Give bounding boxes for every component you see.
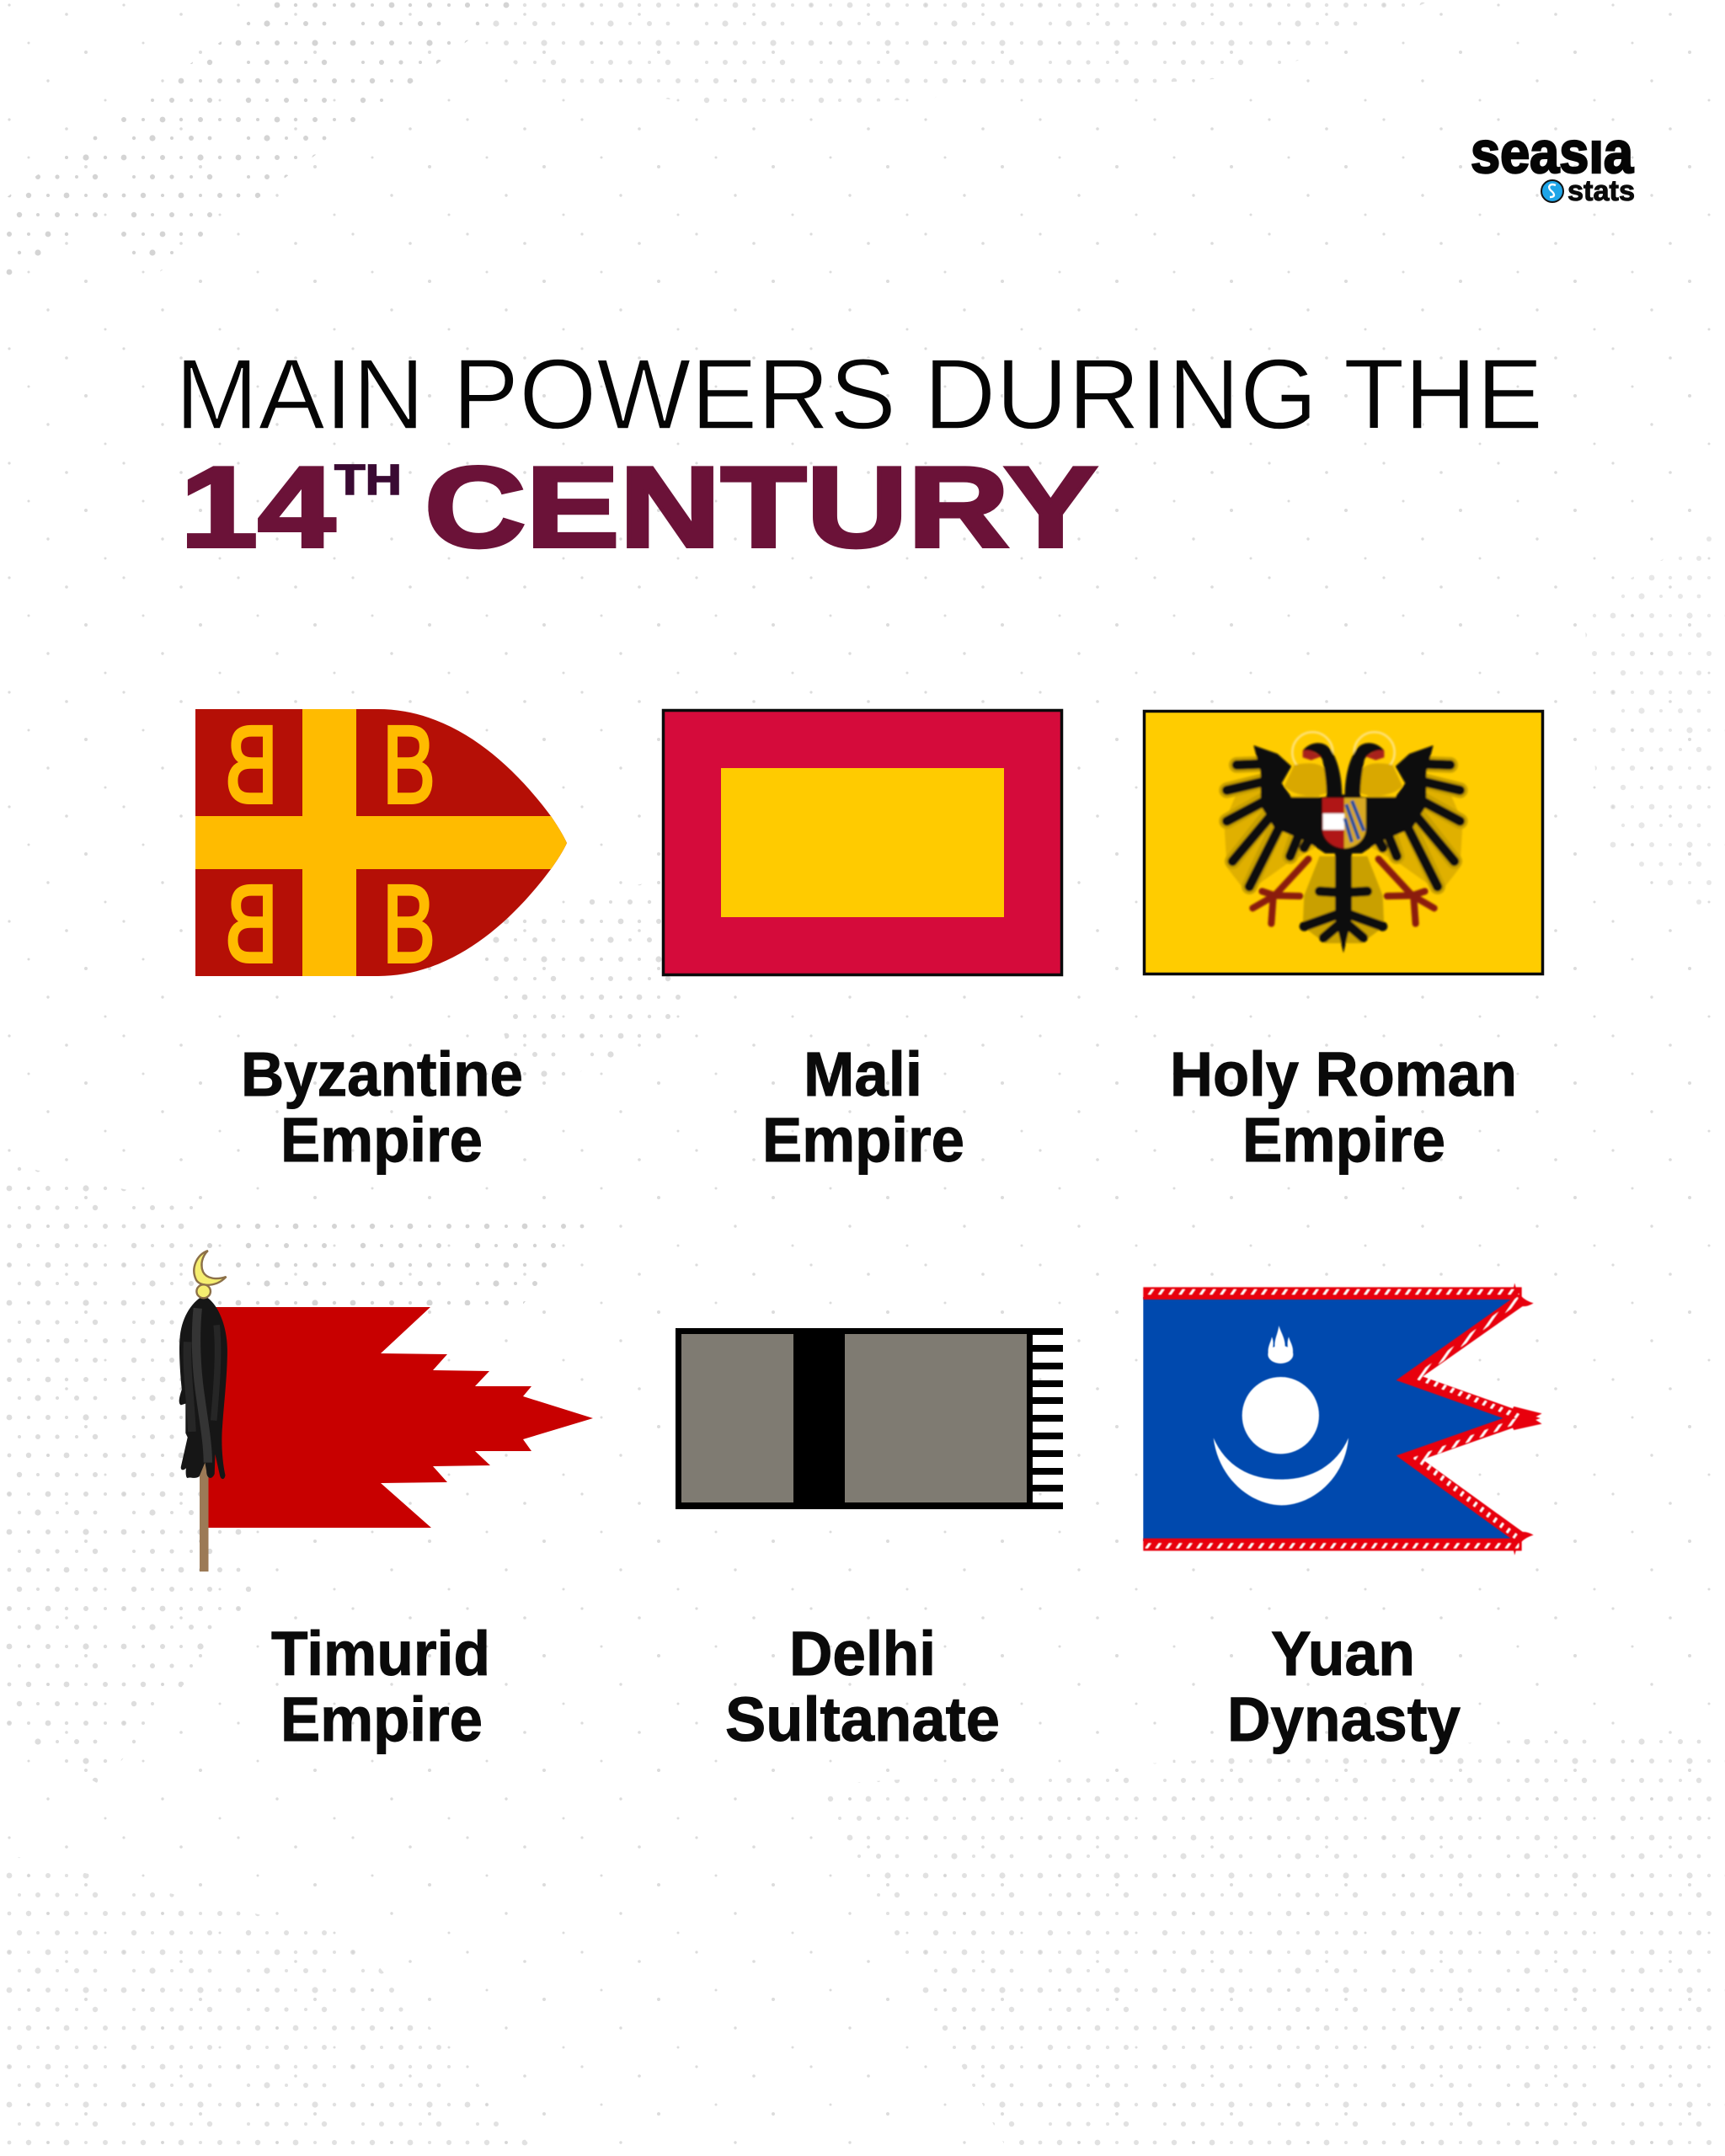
title line 2: TH	[334, 456, 402, 504]
label: Timurid Empire: Empire	[280, 1684, 483, 1754]
label: Mali Empire	[762, 1039, 964, 1175]
panel: Byzantine Empire	[195, 704, 567, 1175]
title line 1: MAIN POWERS DURING THE	[175, 339, 1543, 451]
title line 2: CENTURY	[425, 443, 1097, 571]
label: Delhi Sultanate	[725, 1619, 1000, 1754]
label: Mali Empire: Empire	[762, 1105, 964, 1175]
logo: seasia stats	[1471, 120, 1635, 207]
title	[175, 339, 1543, 571]
flag: Byzantine: B	[225, 704, 278, 827]
flag: Delhi	[676, 1328, 1063, 1509]
label: Byzantine Empire: Byzantine	[241, 1039, 523, 1109]
label: Yuan Dynasty: Dynasty	[1227, 1684, 1461, 1754]
panel: Yuan Dynasty	[1143, 1283, 1542, 1754]
label: Yuan Dynasty: Yuan	[1271, 1619, 1415, 1689]
label: Timurid Empire: Timurid	[271, 1619, 490, 1689]
label: Holy Roman Empire: Empire	[1242, 1105, 1445, 1175]
icon: black tassel and crescent finial	[179, 1251, 227, 1479]
logo icon	[1541, 180, 1563, 202]
label: Holy Roman Empire: Holy Roman	[1170, 1039, 1517, 1109]
label: Mali Empire: Mali	[804, 1039, 922, 1109]
icon: flag pole	[200, 1432, 209, 1572]
panel: Delhi Sultanate	[676, 1328, 1063, 1754]
label: Delhi Sultanate: Sultanate	[725, 1684, 1000, 1754]
flag: Byzantine: B	[382, 863, 435, 986]
icon: double-headed eagle	[1224, 732, 1463, 953]
label: Holy Roman Empire	[1170, 1039, 1517, 1175]
label: Yuan Dynasty	[1227, 1619, 1461, 1754]
flag: Mali	[664, 711, 1061, 975]
flag: Timurid	[179, 1251, 593, 1572]
label: Timurid Empire	[271, 1619, 490, 1754]
label: Byzantine Empire	[241, 1039, 523, 1175]
flag: Yuan	[1143, 1283, 1542, 1556]
title line 2: 14	[180, 443, 335, 571]
icon: eagle shield	[1322, 798, 1366, 848]
icon: soyombo emblem	[1214, 1326, 1348, 1505]
logo wordmark: seasıa	[1471, 120, 1634, 185]
label: Delhi Sultanate: Delhi	[789, 1619, 936, 1689]
label: Byzantine Empire: Empire	[280, 1105, 483, 1175]
title line 2	[180, 443, 1097, 571]
flag: Byzantine: B	[225, 863, 278, 986]
panel: Holy Roman Empire	[1144, 711, 1543, 1175]
flag: Byzantine: B	[382, 704, 435, 827]
logo subword: stats	[1567, 175, 1635, 207]
icon: flag fringe	[1033, 1328, 1063, 1509]
panel: Mali Empire	[664, 711, 1061, 1175]
flag: Holy Roman Empire	[1144, 711, 1543, 974]
panel: Timurid Empire	[179, 1251, 593, 1754]
flag: Byzantine	[195, 704, 567, 986]
